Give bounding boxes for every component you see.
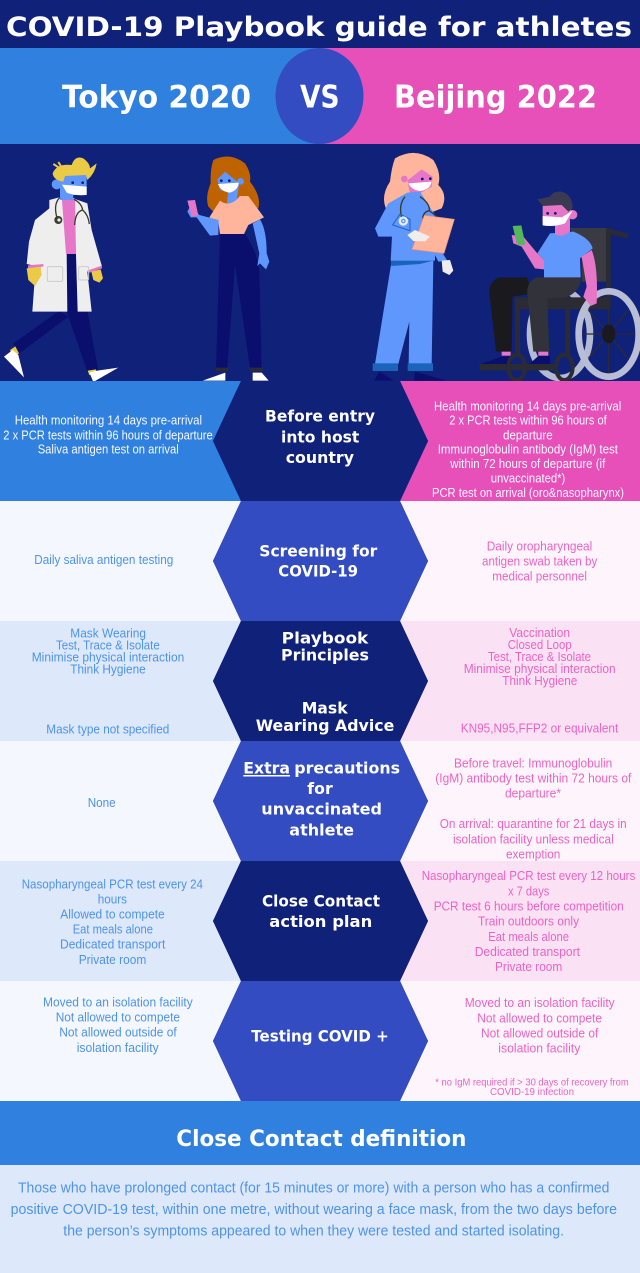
panel: close contact definition text: the person’s symptoms appeared to when they were tested and started isolating. — [63, 1223, 564, 1240]
text: Beijing principles and mask type: Minimise physical interaction — [464, 661, 616, 676]
text: Beijing before entry: departure — [503, 427, 553, 442]
text: Tokyo screening: Daily saliva antigen testing — [34, 552, 173, 567]
text: Beijing before entry: within 72 hours of departure (if — [449, 456, 606, 471]
text: Tokyo extra precautions: None — [88, 795, 116, 810]
text: Tokyo close contact plan — [22, 876, 203, 967]
text: Tokyo testing positive: Not allowed to compete — [56, 1010, 180, 1025]
text: Tokyo principles and mask type: Mask type not specified — [46, 722, 169, 737]
hexagon: before entry — [213, 381, 428, 501]
text: Tokyo close contact plan: hours — [98, 891, 127, 906]
text: Beijing screening: Daily oropharyngeal — [487, 538, 592, 553]
hexagon: screening: COVID-19 — [278, 562, 358, 581]
row band: extra precautions — [0, 741, 640, 861]
heading: close contact definition — [0, 1101, 640, 1165]
icon: woman with phone — [187, 157, 269, 381]
hexagon: playbook principles and mask advice: Mask — [302, 699, 348, 718]
hexagon: before entry: Before entry — [265, 407, 376, 426]
text: Tokyo principles and mask type: Think Hygiene — [70, 662, 146, 677]
text: Tokyo before entry: Health monitoring 14 days pre-arrival — [15, 413, 202, 428]
text: Beijing before entry: unvaccinated*) — [491, 471, 565, 486]
text: Tokyo testing positive: isolation facility — [77, 1040, 159, 1055]
text: Beijing close contact plan: x 7 days — [508, 883, 550, 898]
title: COVID-19 Playbook guide for athletes — [6, 12, 632, 43]
hexagon: testing covid positive: Testing COVID + — [251, 1026, 389, 1045]
text: Tokyo testing positive: Not allowed outside of — [59, 1025, 177, 1040]
text: Beijing screening: medical personnel — [492, 568, 587, 583]
text: Tokyo before entry: Saliva antigen test on arrival — [38, 442, 179, 457]
text: Beijing close contact plan — [422, 868, 636, 974]
hexagon: extra precautions: Extra — [243, 758, 290, 777]
row band: principles and masks — [0, 621, 640, 741]
hexagon: before entry: country — [286, 448, 355, 467]
text: Beijing screening: antigen swab taken by — [482, 553, 598, 568]
text: Beijing close contact plan: Eat meals alone — [488, 929, 569, 944]
text: Beijing close contact plan: Private room — [495, 959, 562, 974]
heading: close contact definition: Close Contact definition — [176, 1127, 467, 1152]
text: Beijing close contact plan: Train outdoors only — [478, 914, 579, 929]
hexagon: screening — [213, 501, 428, 621]
panel: close contact definition text: Those who have prolonged contact (for 15 minutes or more) with a person who has a confirmed — [18, 1179, 609, 1196]
row band: testing positive — [0, 981, 640, 1101]
icon: man in wheelchair with phone — [479, 192, 639, 380]
text: Beijing close contact plan: Dedicated transport — [475, 944, 580, 959]
text: Beijing extra precautions: isolation facility unless medical — [453, 831, 614, 846]
hexagon: extra precautions: athlete — [289, 820, 354, 839]
text: Beijing screening — [482, 538, 598, 583]
text: Beijing extra precautions — [435, 755, 632, 861]
footnote: * no IgM required if > 30 days of recovery from — [435, 1077, 629, 1088]
text: Tokyo close contact plan: Eat meals alone — [73, 922, 153, 937]
row band: close contact — [0, 861, 640, 981]
hexagon: extra precautions — [213, 741, 428, 861]
text: Beijing principles and mask type: Think Hygiene — [502, 673, 577, 688]
hexagon: playbook principles and mask advice — [213, 621, 428, 741]
text: Beijing testing positive — [465, 995, 615, 1056]
panel: close contact definition text: positive COVID-19 test, within one metre, without wearing a face mask, from the two days before — [11, 1201, 617, 1218]
text: Tokyo close contact plan: Private room — [79, 952, 146, 967]
footnote: COVID-19 infection — [490, 1087, 574, 1098]
text: Beijing principles and mask type: Closed Loop — [508, 637, 572, 652]
text: Tokyo principles and mask type: Mask Wearing — [70, 626, 146, 641]
row band: screening — [0, 501, 640, 621]
hexagon: close contact plan: action plan — [269, 912, 372, 931]
text: Beijing principles and mask type: KN95,N95,FFP2 or equivalent — [461, 721, 619, 736]
text: Tokyo testing positive — [43, 994, 193, 1055]
text: Beijing extra precautions: exemption — [506, 846, 560, 861]
text: Tokyo close contact plan: Nasopharyngeal PCR test every 24 — [22, 876, 203, 891]
text: Beijing close contact plan: PCR test 6 hours before competition — [434, 898, 624, 913]
text: Beijing extra precautions: Before travel: Immunoglobulin — [454, 755, 612, 770]
row band: before entry (right) — [400, 381, 640, 501]
text: Beijing before entry: 2 x PCR tests within 96 hours of — [449, 413, 607, 428]
hexagon: testing covid positive — [213, 981, 428, 1101]
text: Beijing principles and mask type: Test, Trace & Isolate — [488, 649, 591, 664]
text: Beijing before entry — [432, 399, 624, 500]
hexagon: before entry: into host — [281, 427, 360, 446]
hexagon: extra precautions: for — [307, 779, 333, 798]
header band: Tokyo vs Beijing: Tokyo 2020 — [62, 80, 251, 116]
text: Beijing principles and mask type: Vaccination — [509, 625, 570, 640]
text: Beijing testing positive: isolation facility — [498, 1041, 581, 1056]
hexagon: extra precautions: precautions — [294, 758, 400, 777]
text: Beijing testing positive: Not allowed outside of — [481, 1026, 599, 1041]
footnote — [435, 1077, 629, 1098]
text: Beijing principles and mask type — [461, 625, 619, 736]
header band: Tokyo vs Beijing — [0, 48, 640, 144]
hexagon: playbook principles and mask advice: Playbook — [282, 628, 369, 647]
hexagon: screening: Screening for — [259, 541, 377, 560]
text: Tokyo close contact plan: Allowed to compete — [60, 906, 165, 921]
illustration panel background — [0, 144, 640, 381]
text: Tokyo before entry: 2 x PCR tests within 96 hours of departure — [3, 427, 213, 442]
hexagon: playbook principles and mask advice: Wearing Advice — [256, 716, 394, 735]
hexagon: playbook principles and mask advice: Principles — [281, 646, 369, 665]
text: Beijing testing positive: Moved to an isolation facility — [465, 995, 615, 1010]
text: Tokyo close contact plan: Dedicated transport — [60, 937, 166, 952]
text: Beijing before entry: Immunoglobulin antibody (IgM) test — [438, 442, 618, 457]
panel: close contact definition text — [0, 1165, 640, 1273]
text: Tokyo before entry — [3, 413, 213, 457]
header band: Tokyo vs Beijing: Beijing 2022 — [394, 80, 597, 116]
text: Tokyo principles and mask type: Minimise physical interaction — [32, 650, 184, 665]
text: Tokyo principles and mask type: Test, Trace & Isolate — [56, 638, 160, 653]
hexagon: extra precautions: unvaccinated — [261, 799, 382, 818]
text: Tokyo principles and mask type — [32, 626, 184, 737]
text: Tokyo testing positive: Moved to an isolation facility — [43, 994, 193, 1009]
text: Beijing testing positive: Not allowed to compete — [477, 1010, 602, 1025]
row band: before entry (left) — [0, 381, 241, 501]
text: Beijing extra precautions: departure* — [505, 786, 561, 801]
icon: nurse with clipboard — [373, 153, 454, 381]
hexagon: close contact plan: Close Contact — [262, 891, 380, 910]
hexagon: close contact plan — [213, 861, 428, 981]
icon: doctor in white coat — [4, 157, 118, 382]
header band: Tokyo vs Beijing: VS — [300, 80, 340, 116]
